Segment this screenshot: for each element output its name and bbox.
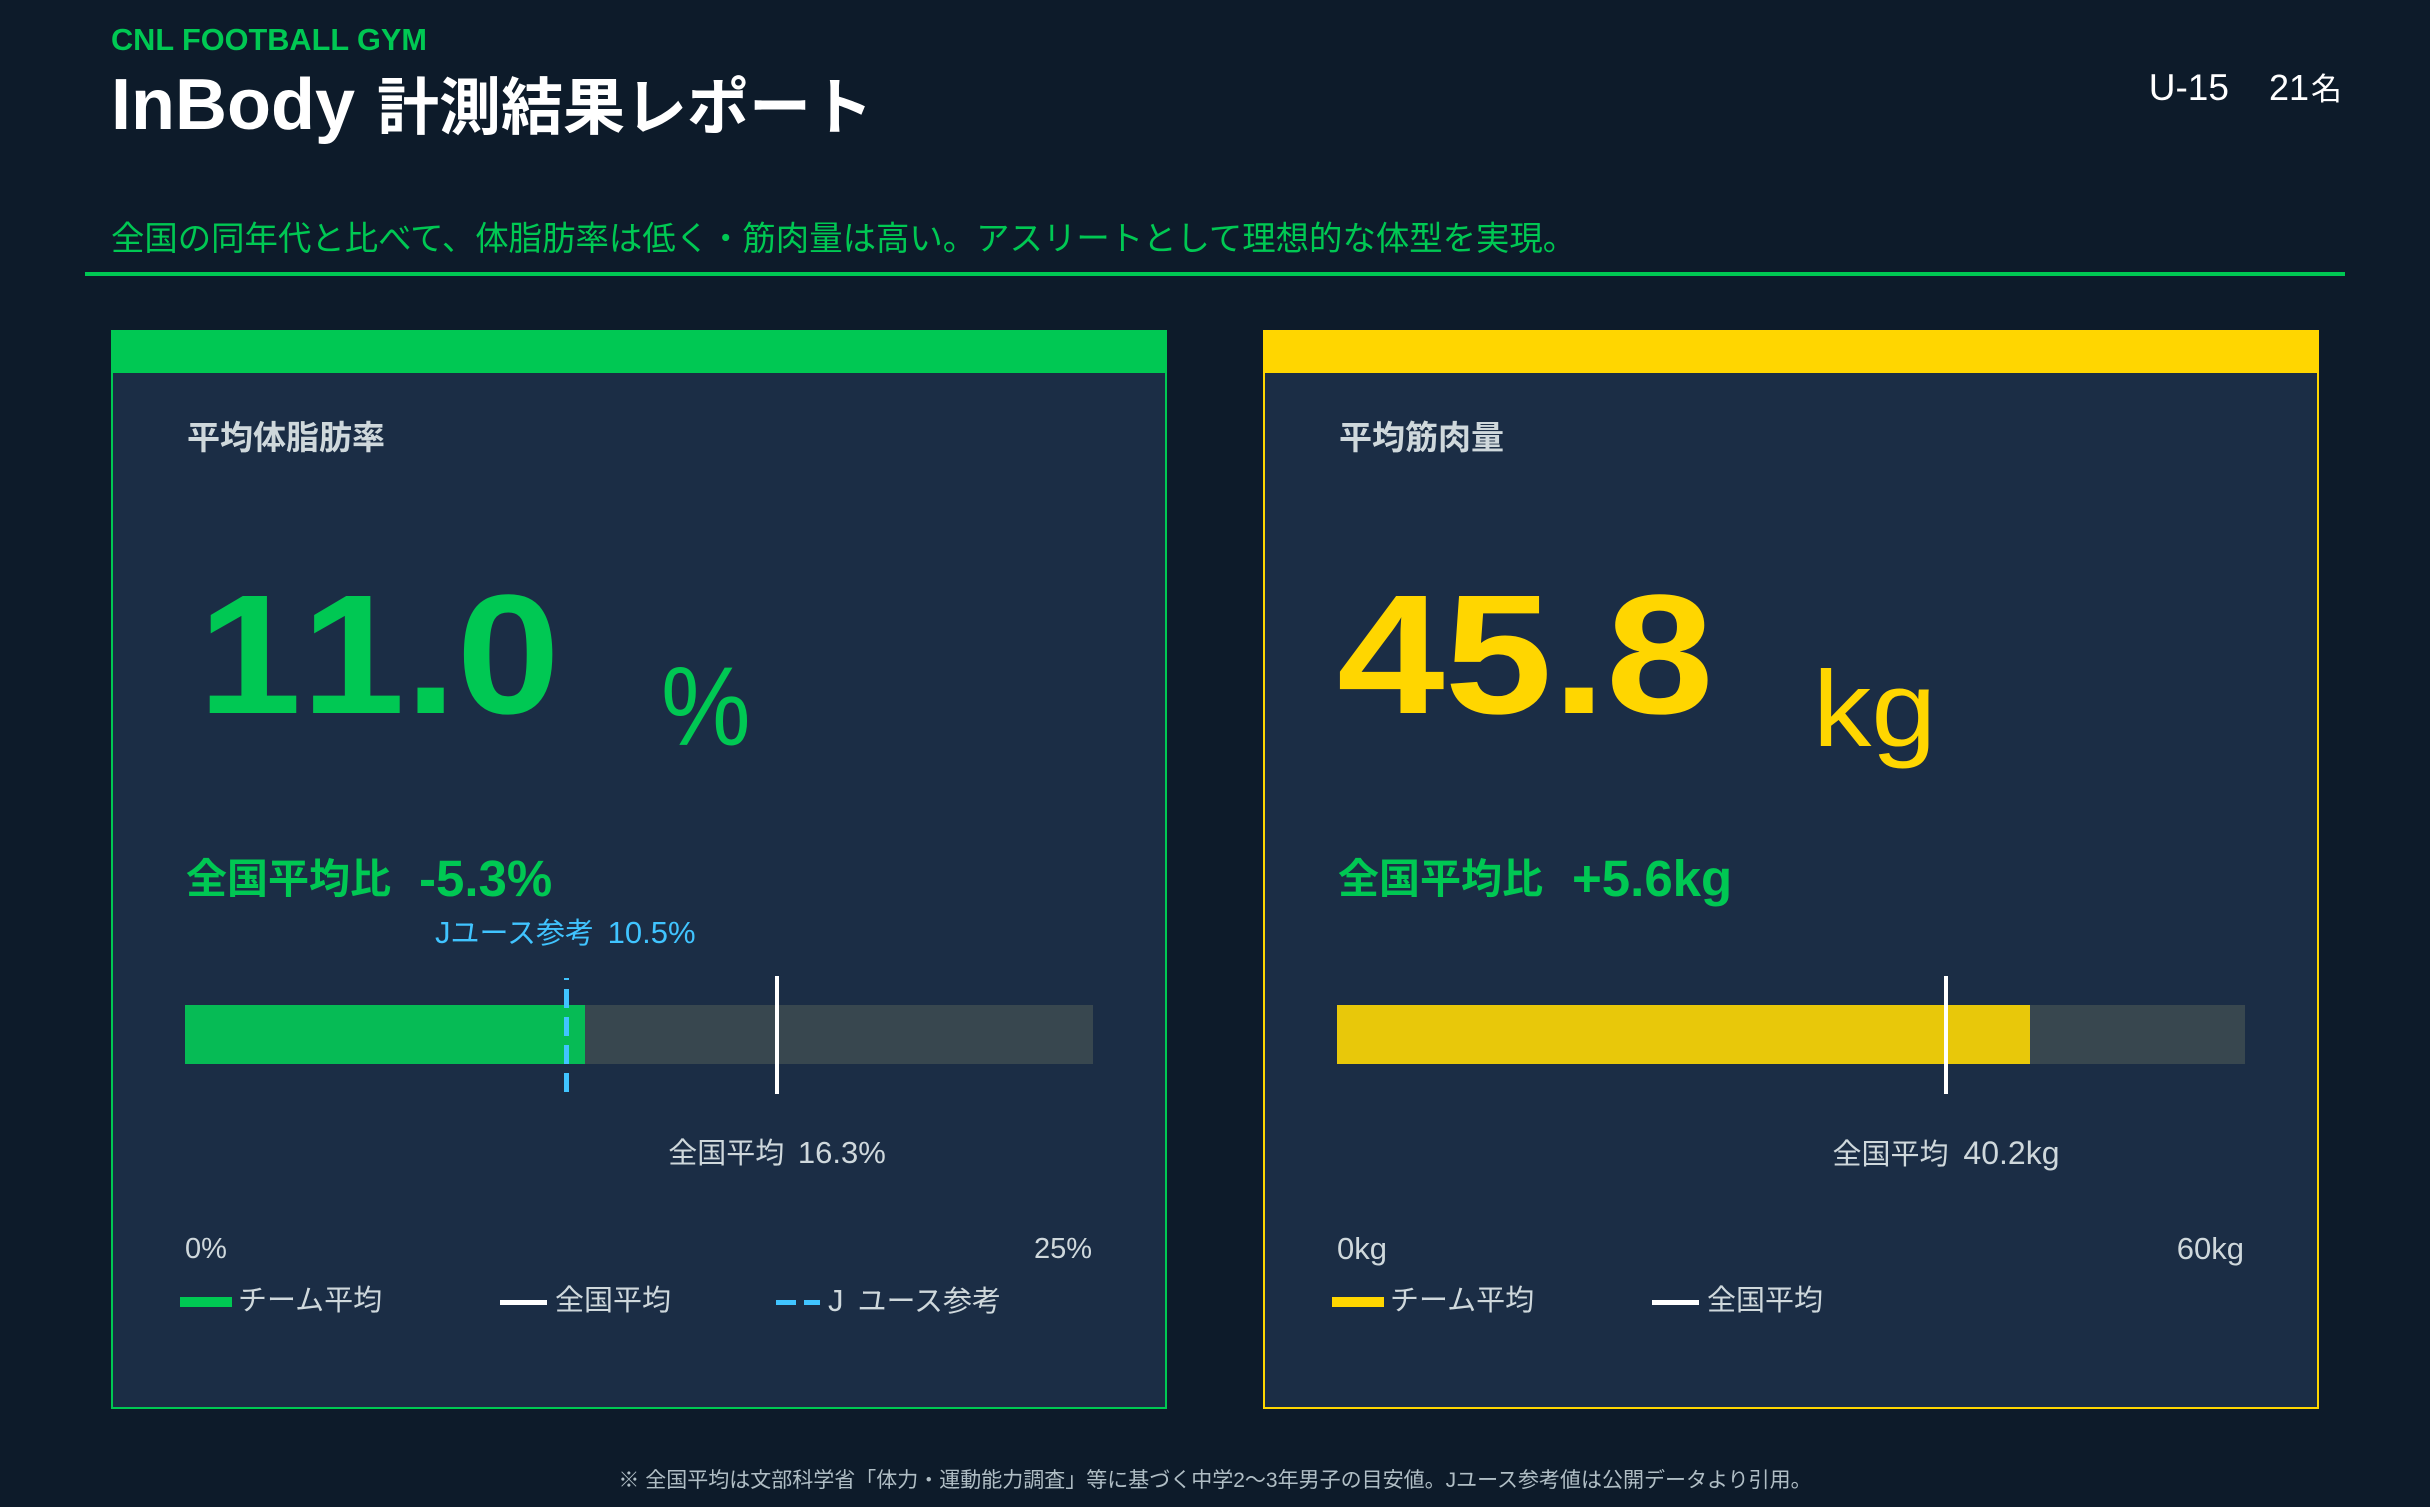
comparison caption: 全国平均比 bbox=[1338, 856, 1543, 902]
national average label: 全国平均 40.2kg bbox=[1832, 1135, 2059, 1171]
legend: team bbox=[180, 1285, 382, 1317]
comparison caption: 全国平均比 bbox=[186, 856, 391, 902]
axis min: 0kg bbox=[1337, 1231, 1387, 1266]
legend: J youth bbox=[776, 1283, 1001, 1318]
big value: 11.0 bbox=[198, 560, 560, 750]
panel: body fat bbox=[111, 330, 1167, 1409]
national average marker bbox=[1944, 976, 1948, 1094]
legend: national bbox=[1652, 1285, 1823, 1317]
comparison label bbox=[186, 850, 552, 907]
axis min: 0% bbox=[185, 1233, 227, 1265]
legend dash one bbox=[776, 1300, 796, 1305]
J youth label: Jユース参考 10.5% bbox=[435, 915, 696, 950]
legend label: J ユース参考 bbox=[828, 1283, 1001, 1318]
legend: national bbox=[500, 1285, 671, 1317]
legend swatch bbox=[180, 1297, 232, 1307]
footnote: ※ 全国平均は文部科学省「体力・運動能力調査」等に基づく中学2〜3年男子の目安値。Jユース参考値は公開データより引用。 bbox=[618, 1469, 1812, 1492]
panel header band bbox=[1263, 330, 2319, 373]
national average marker bbox=[775, 976, 779, 1094]
legend swatch bbox=[1332, 1297, 1384, 1307]
legend label: 全国平均 bbox=[1707, 1285, 1823, 1317]
legend swatch bbox=[500, 1300, 547, 1305]
bar track bbox=[1337, 1005, 2245, 1064]
legend label: チーム平均 bbox=[238, 1285, 382, 1317]
comparison value: +5.6kg bbox=[1572, 850, 1732, 907]
brand label: CNL FOOTBALL GYM bbox=[111, 22, 427, 57]
summary text: 全国の同年代と比べて、体脂肪率は低く・筋肉量は高い。アスリートとして理想的な体型を実現。 bbox=[111, 221, 1576, 258]
panel header band bbox=[111, 330, 1167, 373]
panel heading: 平均体脂肪率 bbox=[187, 419, 385, 456]
panel heading: 平均筋肉量 bbox=[1339, 419, 1504, 456]
big value: 45.8 bbox=[1337, 560, 1714, 750]
national average label: 全国平均 16.3% bbox=[668, 1135, 886, 1170]
bar fill bbox=[185, 1005, 585, 1064]
axis max: 60kg bbox=[2177, 1231, 2244, 1266]
comparison label bbox=[1338, 850, 1732, 907]
team info: U-15 21名 bbox=[2149, 67, 2342, 108]
title: InBody 計測結果レポート bbox=[111, 65, 873, 145]
header rule bbox=[85, 272, 2345, 276]
bar fill bbox=[1337, 1005, 2030, 1064]
legend dash two bbox=[804, 1300, 820, 1305]
comparison value: -5.3% bbox=[419, 850, 552, 907]
unit: kg bbox=[1813, 648, 1936, 769]
legend label: 全国平均 bbox=[555, 1285, 671, 1317]
legend swatch bbox=[1652, 1300, 1699, 1305]
legend label: チーム平均 bbox=[1390, 1285, 1534, 1317]
axis max: 25% bbox=[1034, 1233, 1092, 1265]
legend: team bbox=[1332, 1285, 1534, 1317]
J youth marker bbox=[564, 978, 569, 1092]
panel: muscle mass bbox=[1263, 330, 2319, 1409]
unit: % bbox=[661, 644, 751, 769]
bar track bbox=[185, 1005, 1093, 1064]
